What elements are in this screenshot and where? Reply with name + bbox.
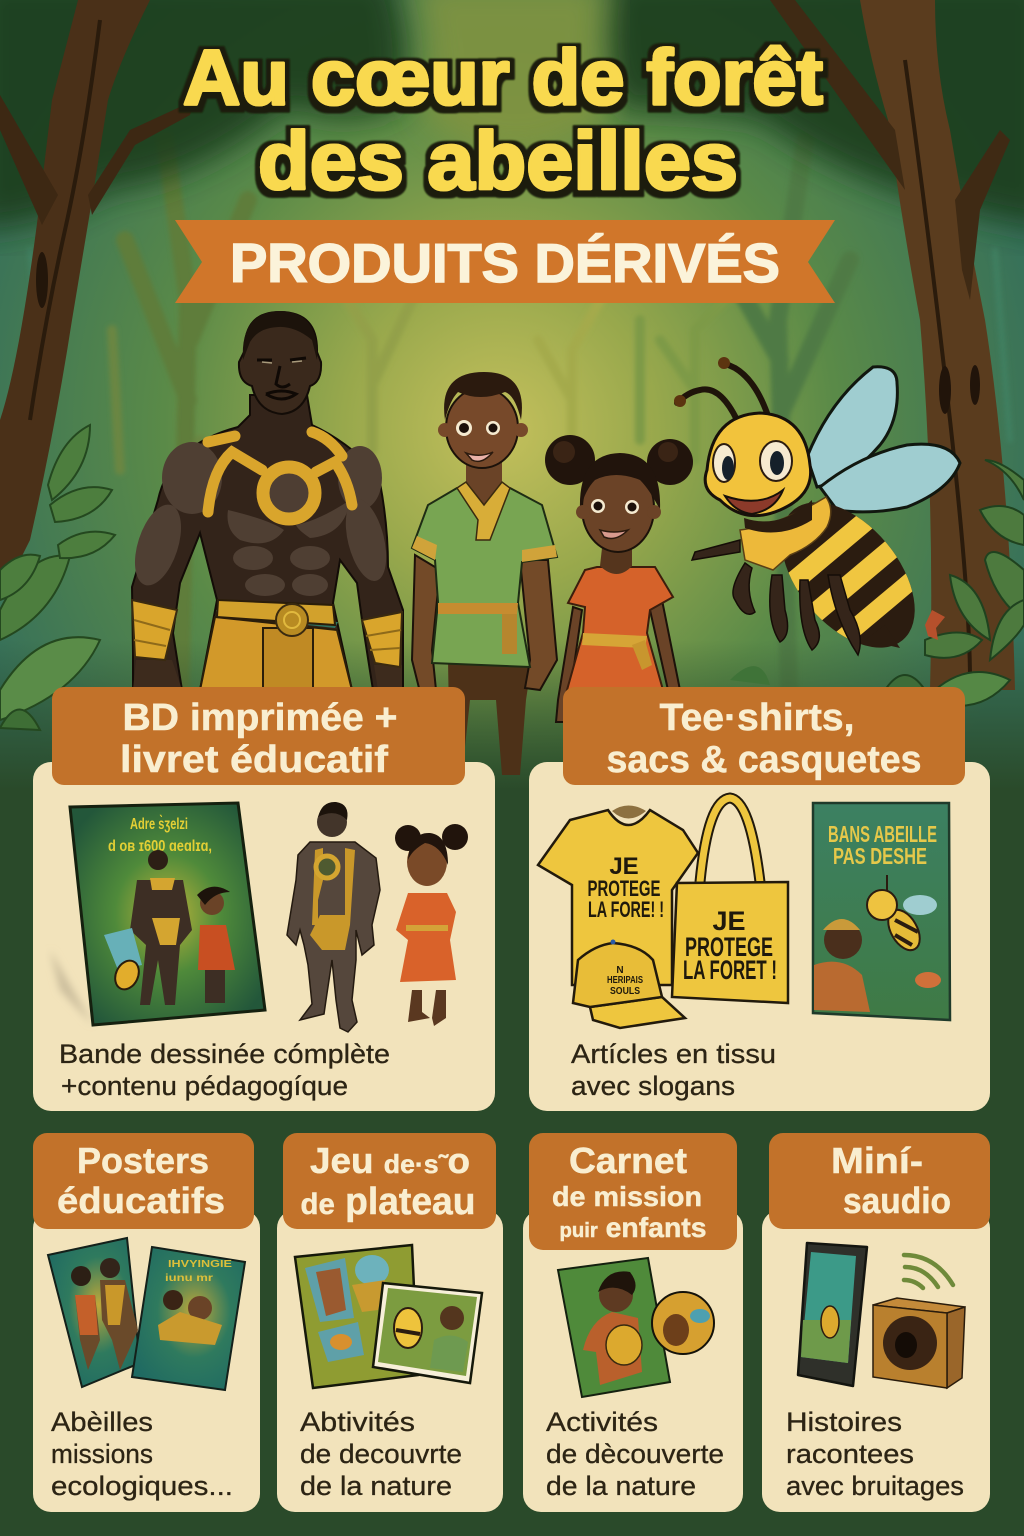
- tote bag: JE: [712, 906, 746, 936]
- panel: BD imprimée: [33, 687, 495, 1111]
- text: game description: Abtivités: [300, 1407, 415, 1437]
- comic book cover: Adre s̀ʒelzi: [130, 813, 188, 833]
- character: girl: [545, 435, 693, 722]
- bee abdomen: [755, 478, 941, 672]
- panel: textiles: [529, 687, 990, 1111]
- smartphone: [798, 1243, 867, 1386]
- bee legs: [692, 540, 860, 655]
- text: carnet description: de la nature: [546, 1471, 696, 1501]
- text: textile description: Artícles en tissu: [571, 1039, 776, 1069]
- game board and card: [295, 1245, 482, 1388]
- panel: posters: [33, 1133, 260, 1512]
- title: [183, 33, 823, 207]
- slogan poster: PAS DESHE: [833, 843, 927, 869]
- text: posters description: ecologiques...: [51, 1471, 233, 1501]
- cap: SOULS: [610, 986, 640, 997]
- tee-shirt: PROTEGE: [588, 876, 660, 901]
- panel heading: posters: [33, 1133, 254, 1229]
- text: audio description: avec bruitages: [786, 1471, 964, 1501]
- text: audio description: racontees: [786, 1439, 914, 1469]
- text: audio description: Histoires: [786, 1407, 902, 1437]
- man muscles: [126, 442, 394, 596]
- man arms lower: [133, 660, 402, 690]
- poster illustrations: IHVYINGIE: [168, 1259, 232, 1270]
- speaker with sound waves: [873, 1255, 965, 1388]
- tote bag: PROTEGE: [685, 932, 773, 962]
- notebook and badge: [558, 1258, 714, 1397]
- panel heading: BD: [52, 687, 465, 785]
- panel heading: BD: livret éducatif: [120, 739, 388, 781]
- panel heading: carnet: Carnet: [569, 1140, 687, 1181]
- bee head: [705, 413, 811, 516]
- cap: N: [616, 965, 624, 976]
- text: textile description: [571, 1039, 776, 1101]
- panel heading: game: [283, 1133, 496, 1229]
- panel heading: textiles: [563, 687, 965, 785]
- slogan poster: BANS ABEILLE: [828, 821, 937, 847]
- man head: [239, 312, 321, 414]
- text: audio description: [786, 1407, 964, 1501]
- title: des abeilles: [258, 116, 738, 207]
- tree: right trunk: [770, 0, 1015, 690]
- text: posters description: missions: [51, 1439, 153, 1469]
- text: carnet description: Activités: [546, 1407, 658, 1437]
- comic book cover: [50, 803, 265, 1025]
- text: textile description: avec slogans: [571, 1071, 735, 1101]
- panel heading: audio: [769, 1133, 990, 1229]
- text: carnet description: [546, 1407, 724, 1501]
- man loincloth: [200, 617, 352, 690]
- slogan poster: [813, 803, 950, 1020]
- character: bee mascot: [674, 357, 960, 672]
- poster illustrations: iunu mr: [165, 1273, 213, 1284]
- text: game description: de decouvrte: [300, 1439, 462, 1469]
- character: boy: [412, 372, 557, 775]
- tee-shirt: [538, 806, 698, 985]
- panel heading: textiles: Tee·shirts,: [660, 697, 854, 739]
- character: hero man: [126, 311, 403, 690]
- panel heading: game: Jeu de·s˜o: [310, 1140, 470, 1181]
- text: carnet description: de dècouverte: [546, 1439, 724, 1469]
- title: Au cœur de forêt: [183, 33, 823, 121]
- text: game description: [300, 1407, 462, 1501]
- panel heading: carnet: de mission: [552, 1181, 702, 1212]
- panel heading: textiles: sacs & casquetes: [606, 739, 922, 781]
- bee collar: [740, 497, 831, 570]
- panel heading: posters: éducatifs: [57, 1180, 225, 1221]
- cap: HERIPAIS: [607, 975, 643, 986]
- poster illustrations: [48, 1238, 245, 1390]
- tote bag: LA FORET !: [683, 955, 777, 985]
- panel heading: carnet: puir enfants: [560, 1212, 706, 1243]
- panel heading: BD: BD imprimée +: [122, 697, 398, 739]
- text: BD description: [59, 1039, 390, 1101]
- panel heading: posters: Posters: [77, 1140, 209, 1181]
- character figures: [287, 802, 468, 1032]
- tee-shirt: LA FORE! !: [588, 897, 664, 922]
- comic book cover: d oʙ ɪ600 ɑeɑlɪɑ,: [108, 838, 212, 855]
- panel heading: audio: Miní-: [831, 1140, 923, 1181]
- foliage: left plants: [0, 425, 115, 730]
- panel heading: game: de plateau: [300, 1181, 476, 1223]
- man wrist bands: [132, 600, 402, 667]
- foliage: right plants: [730, 460, 1024, 706]
- panel: board game: [277, 1133, 503, 1512]
- text: BD description: +contenu pédagogíque: [61, 1071, 348, 1101]
- panel: mini audio: [762, 1133, 990, 1512]
- text: BD description: Bande dessinée cómplète: [59, 1039, 390, 1069]
- text: posters description: Abèilles: [51, 1407, 153, 1437]
- tote bag: [672, 798, 788, 1003]
- text: game description: de la nature: [300, 1471, 452, 1501]
- cap: [573, 940, 685, 1028]
- text: posters description: [51, 1407, 233, 1501]
- banner: produits dérivés: PRODUITS DÉRIVÉS: [230, 232, 780, 294]
- man gold straps: [208, 432, 352, 512]
- banner: produits dérivés: [175, 220, 835, 303]
- tree: left trunk: [0, 0, 195, 600]
- panel heading: audio: saudio: [843, 1180, 951, 1221]
- panel heading: carnet: [529, 1133, 737, 1250]
- panel: carnet: [523, 1133, 743, 1512]
- tee-shirt: JE: [609, 853, 639, 880]
